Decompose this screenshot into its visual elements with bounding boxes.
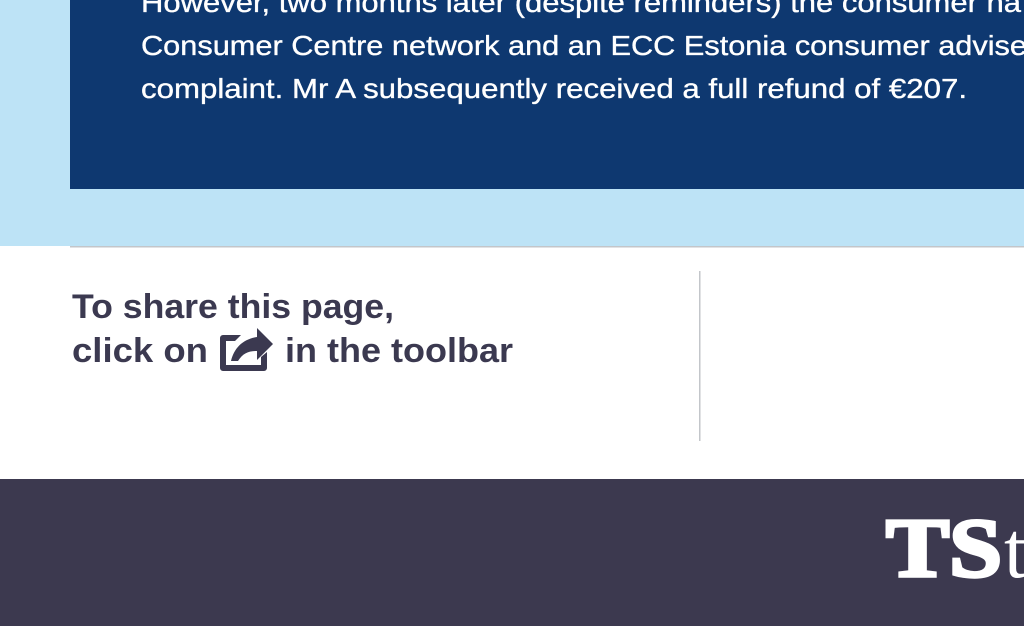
case study text: Consumer Centre network and an ECC Estonia consumer advise [141,30,1024,61]
share instruction: in the toolbar [285,332,513,370]
case study text [141,0,1024,104]
icon: share arrow [220,328,273,371]
share instruction: To share this page, [72,288,394,326]
light blue background band [0,0,1024,246]
share instruction [72,288,513,371]
share instruction: click on [72,332,208,370]
panel: case study [70,0,1024,189]
logo: TS [886,502,1002,595]
footer bar [0,479,1024,626]
case study text: complaint. Mr A subsequently received a full refund of €207. [141,73,967,104]
